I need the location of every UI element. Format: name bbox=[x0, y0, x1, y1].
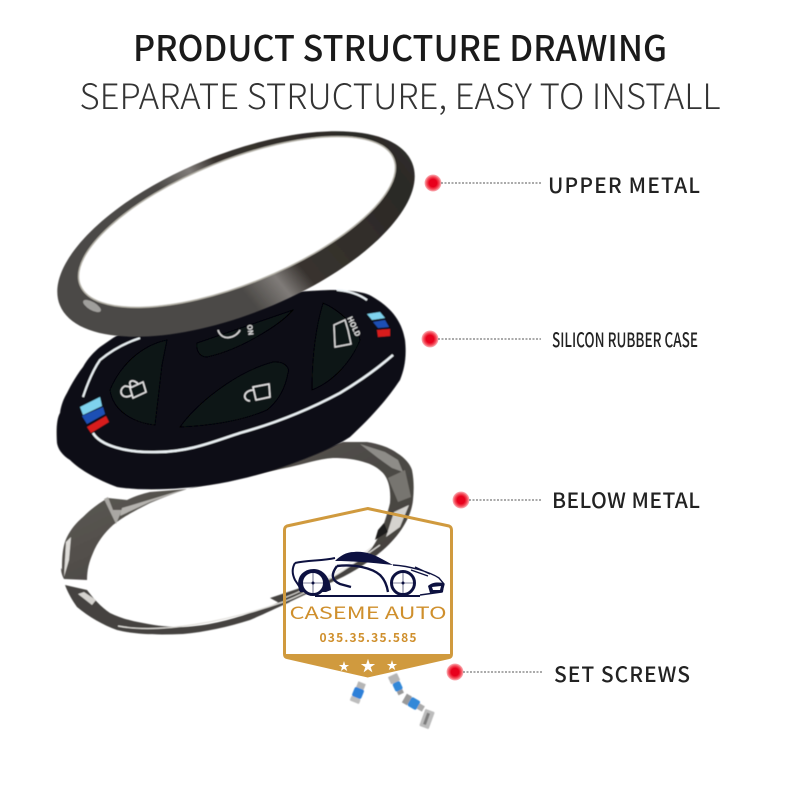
lower ring upper section bbox=[61, 442, 414, 605]
label: set screws: SET SCREWS bbox=[554, 659, 690, 689]
logo band bbox=[285, 654, 451, 677]
power icon bbox=[218, 324, 255, 338]
label: upper metal: UPPER METAL bbox=[548, 170, 700, 200]
title: PRODUCT STRUCTURE DRAWING bbox=[133, 21, 667, 72]
case buttons bbox=[110, 303, 360, 427]
lower ring grooves bbox=[118, 545, 380, 629]
label: silicon rubber case bbox=[422, 324, 698, 353]
lock icon left bbox=[121, 381, 146, 398]
label: below metal: BELOW METAL bbox=[552, 485, 700, 515]
stars bbox=[338, 655, 398, 676]
logo badge bbox=[284, 508, 452, 677]
lower ring bottom section bbox=[65, 585, 290, 635]
car underline bbox=[315, 595, 420, 597]
wheels bbox=[302, 572, 324, 594]
brand name: CASEME AUTO bbox=[290, 599, 446, 624]
car bbox=[293, 552, 444, 596]
label: silicon rubber case: SILICON RUBBER CASE bbox=[552, 324, 698, 353]
stars: ★ bbox=[360, 655, 376, 676]
car rear outline bbox=[293, 558, 335, 589]
upper metal ring bbox=[30, 89, 442, 379]
ring outer body bbox=[30, 89, 442, 379]
car roof and window bbox=[335, 552, 393, 565]
set screws bbox=[350, 673, 435, 729]
hold icon: HOLD bbox=[344, 315, 363, 338]
car side sweep bbox=[333, 565, 388, 592]
silicone rubber case bbox=[57, 290, 406, 489]
car hood bbox=[393, 565, 444, 595]
car grille bbox=[428, 582, 444, 593]
white trim line bbox=[93, 355, 393, 452]
label: set screws bbox=[446, 659, 690, 689]
stripes right bbox=[367, 312, 390, 337]
power icon: ON bbox=[244, 324, 255, 336]
stars: ★ bbox=[338, 658, 350, 674]
ring highlight bbox=[81, 298, 103, 314]
car rear arch bbox=[298, 569, 331, 592]
phone number: 035.35.35.585 bbox=[320, 629, 416, 646]
lower metal ring bbox=[61, 442, 414, 635]
stripes left bbox=[80, 397, 109, 433]
lock icon right bbox=[245, 384, 270, 401]
subtitle: SEPARATE STRUCTURE, EASY TO INSTALL bbox=[80, 69, 720, 120]
label: upper metal bbox=[424, 170, 700, 200]
ring inner opening bbox=[57, 101, 417, 343]
hold icon bbox=[334, 315, 363, 347]
label: below metal bbox=[452, 485, 700, 515]
stars: ★ bbox=[386, 657, 398, 673]
